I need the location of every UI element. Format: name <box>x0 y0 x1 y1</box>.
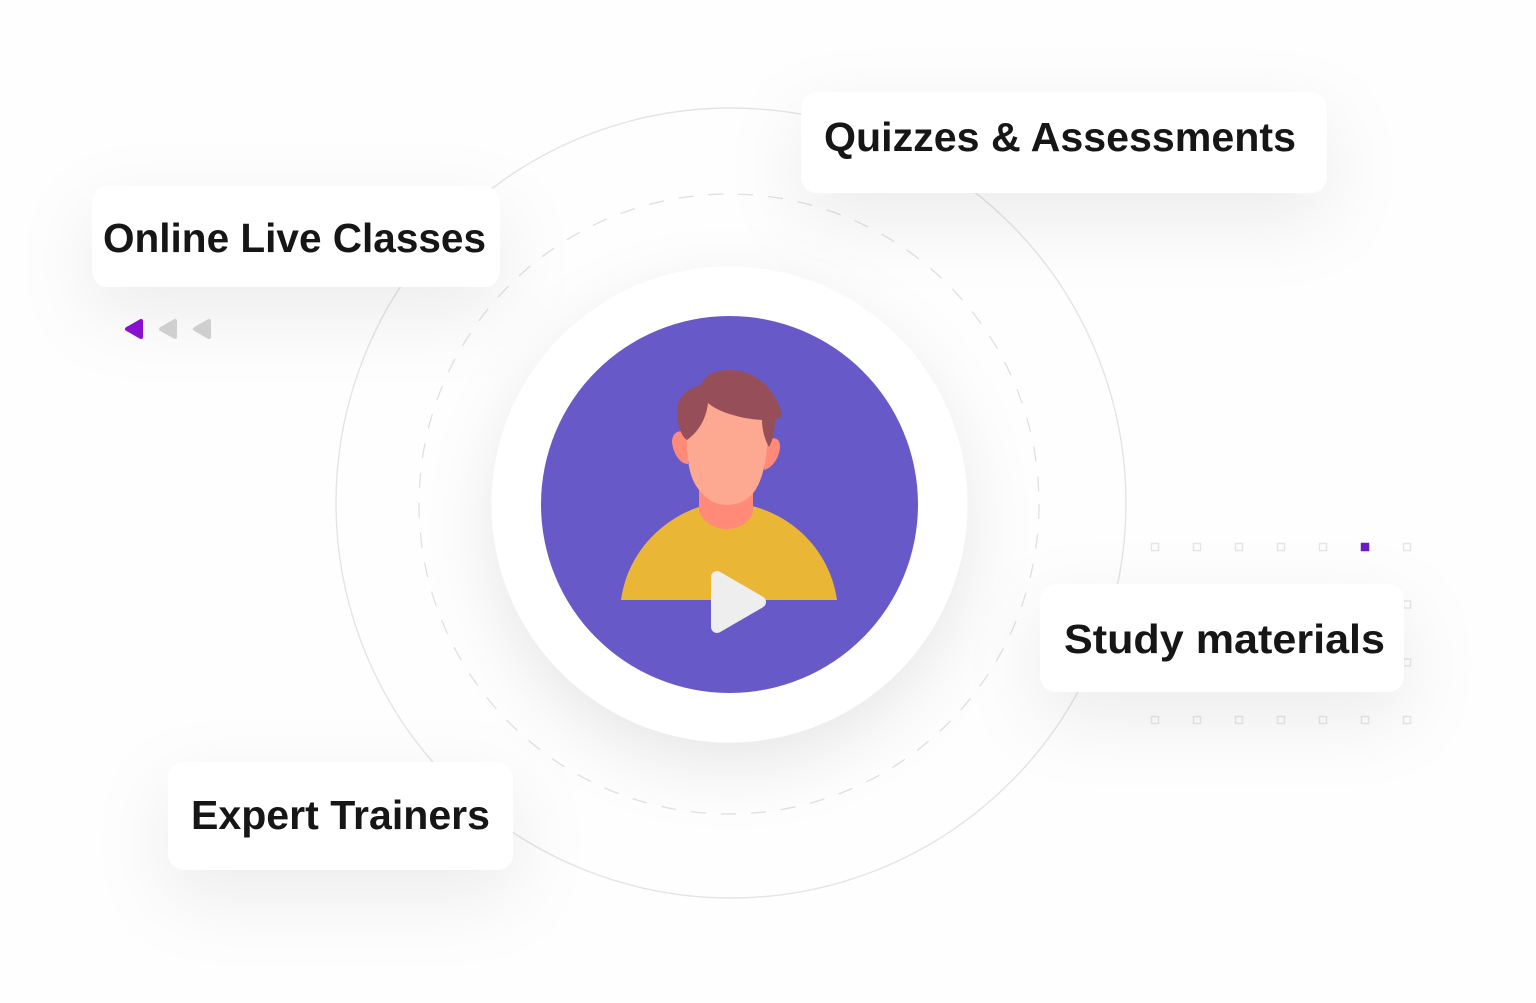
icon: play button <box>717 577 760 627</box>
left ear <box>672 431 688 464</box>
outer ring <box>336 108 1126 898</box>
neck <box>699 488 753 529</box>
dot grid decoration <box>1152 544 1410 724</box>
right ear <box>764 438 780 470</box>
card: Quizzes & Assessments <box>801 92 1327 193</box>
card: Study materials <box>1040 584 1404 692</box>
icon: person avatar <box>621 370 837 600</box>
card: Online Live Classes <box>92 186 500 287</box>
dashed ring <box>419 194 1039 814</box>
label: Quizzes & Assessments <box>824 114 1296 160</box>
center badge: purple disc <box>541 316 918 693</box>
icon: carousel arrows <box>127 321 209 337</box>
center badge: white disc <box>492 266 968 742</box>
hair <box>677 370 782 447</box>
label: Expert Trainers <box>191 792 490 838</box>
card: Expert Trainers <box>168 762 513 870</box>
label: Study materials <box>1064 616 1385 662</box>
shirt <box>621 506 837 600</box>
label: Online Live Classes <box>103 215 486 261</box>
face <box>687 398 768 505</box>
